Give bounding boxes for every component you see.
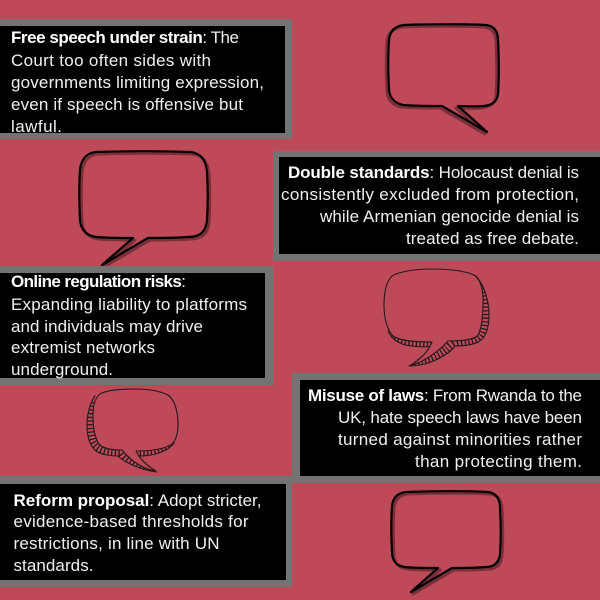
text: reform proposal [14, 491, 262, 575]
text: online regulation risks: and individuals may drive [11, 317, 203, 336]
panel: double standards [273, 151, 600, 261]
text: reform proposal: Reform proposal: Adopt stricter, [14, 491, 262, 510]
icon: speech bubble bottom right [391, 491, 503, 594]
text: double standards: treated as free debate. [406, 229, 579, 248]
text: online regulation risks: underground. [11, 360, 113, 379]
text: misuse of laws: than protecting them. [415, 452, 582, 471]
text: reform proposal: evidence-based thresholds for [14, 512, 249, 531]
text: misuse of laws: UK, hate speech laws have been [338, 408, 582, 427]
text: misuse of laws [308, 386, 582, 471]
text: online regulation risks: extremist networks [11, 338, 155, 357]
text: online regulation risks [11, 272, 247, 379]
text: misuse of laws: turned against minorities rather [338, 430, 582, 449]
panel: free speech under strain [0, 19, 292, 139]
text: double standards: consistently excluded from protection, [281, 185, 579, 204]
text: online regulation risks: Expanding liability to platforms [11, 295, 247, 314]
text: free speech under strain: Free speech under strain: The [11, 28, 239, 47]
text: reform proposal: standards. [14, 556, 94, 575]
text: misuse of laws: Misuse of laws: From Rwanda to the [308, 386, 582, 405]
text: free speech under strain: governments limiting expression, [11, 73, 264, 92]
icon: speech bubble upper left [79, 151, 210, 267]
icon: hatched speech bubble right [384, 269, 489, 366]
text: double standards: while Armenian genocide denial is [319, 207, 579, 226]
text: free speech under strain [11, 28, 264, 136]
icon: speech bubble top right [386, 24, 499, 134]
text: free speech under strain: lawful. [11, 117, 62, 136]
text: double standards: Double standards: Holocaust denial is [288, 163, 579, 182]
text: online regulation risks: Online regulation risks: [11, 272, 186, 291]
text: free speech under strain: even if speech is offensive but [11, 95, 243, 114]
text: free speech under strain: Court too often sides with [11, 51, 211, 70]
icon: hatched speech bubble left [87, 389, 178, 472]
panel: online regulation risks [0, 266, 273, 385]
text: double standards [281, 163, 579, 248]
panel: reform proposal [0, 476, 292, 587]
text: reform proposal: restrictions, in line with UN [14, 534, 220, 553]
panel: misuse of laws [292, 373, 600, 483]
